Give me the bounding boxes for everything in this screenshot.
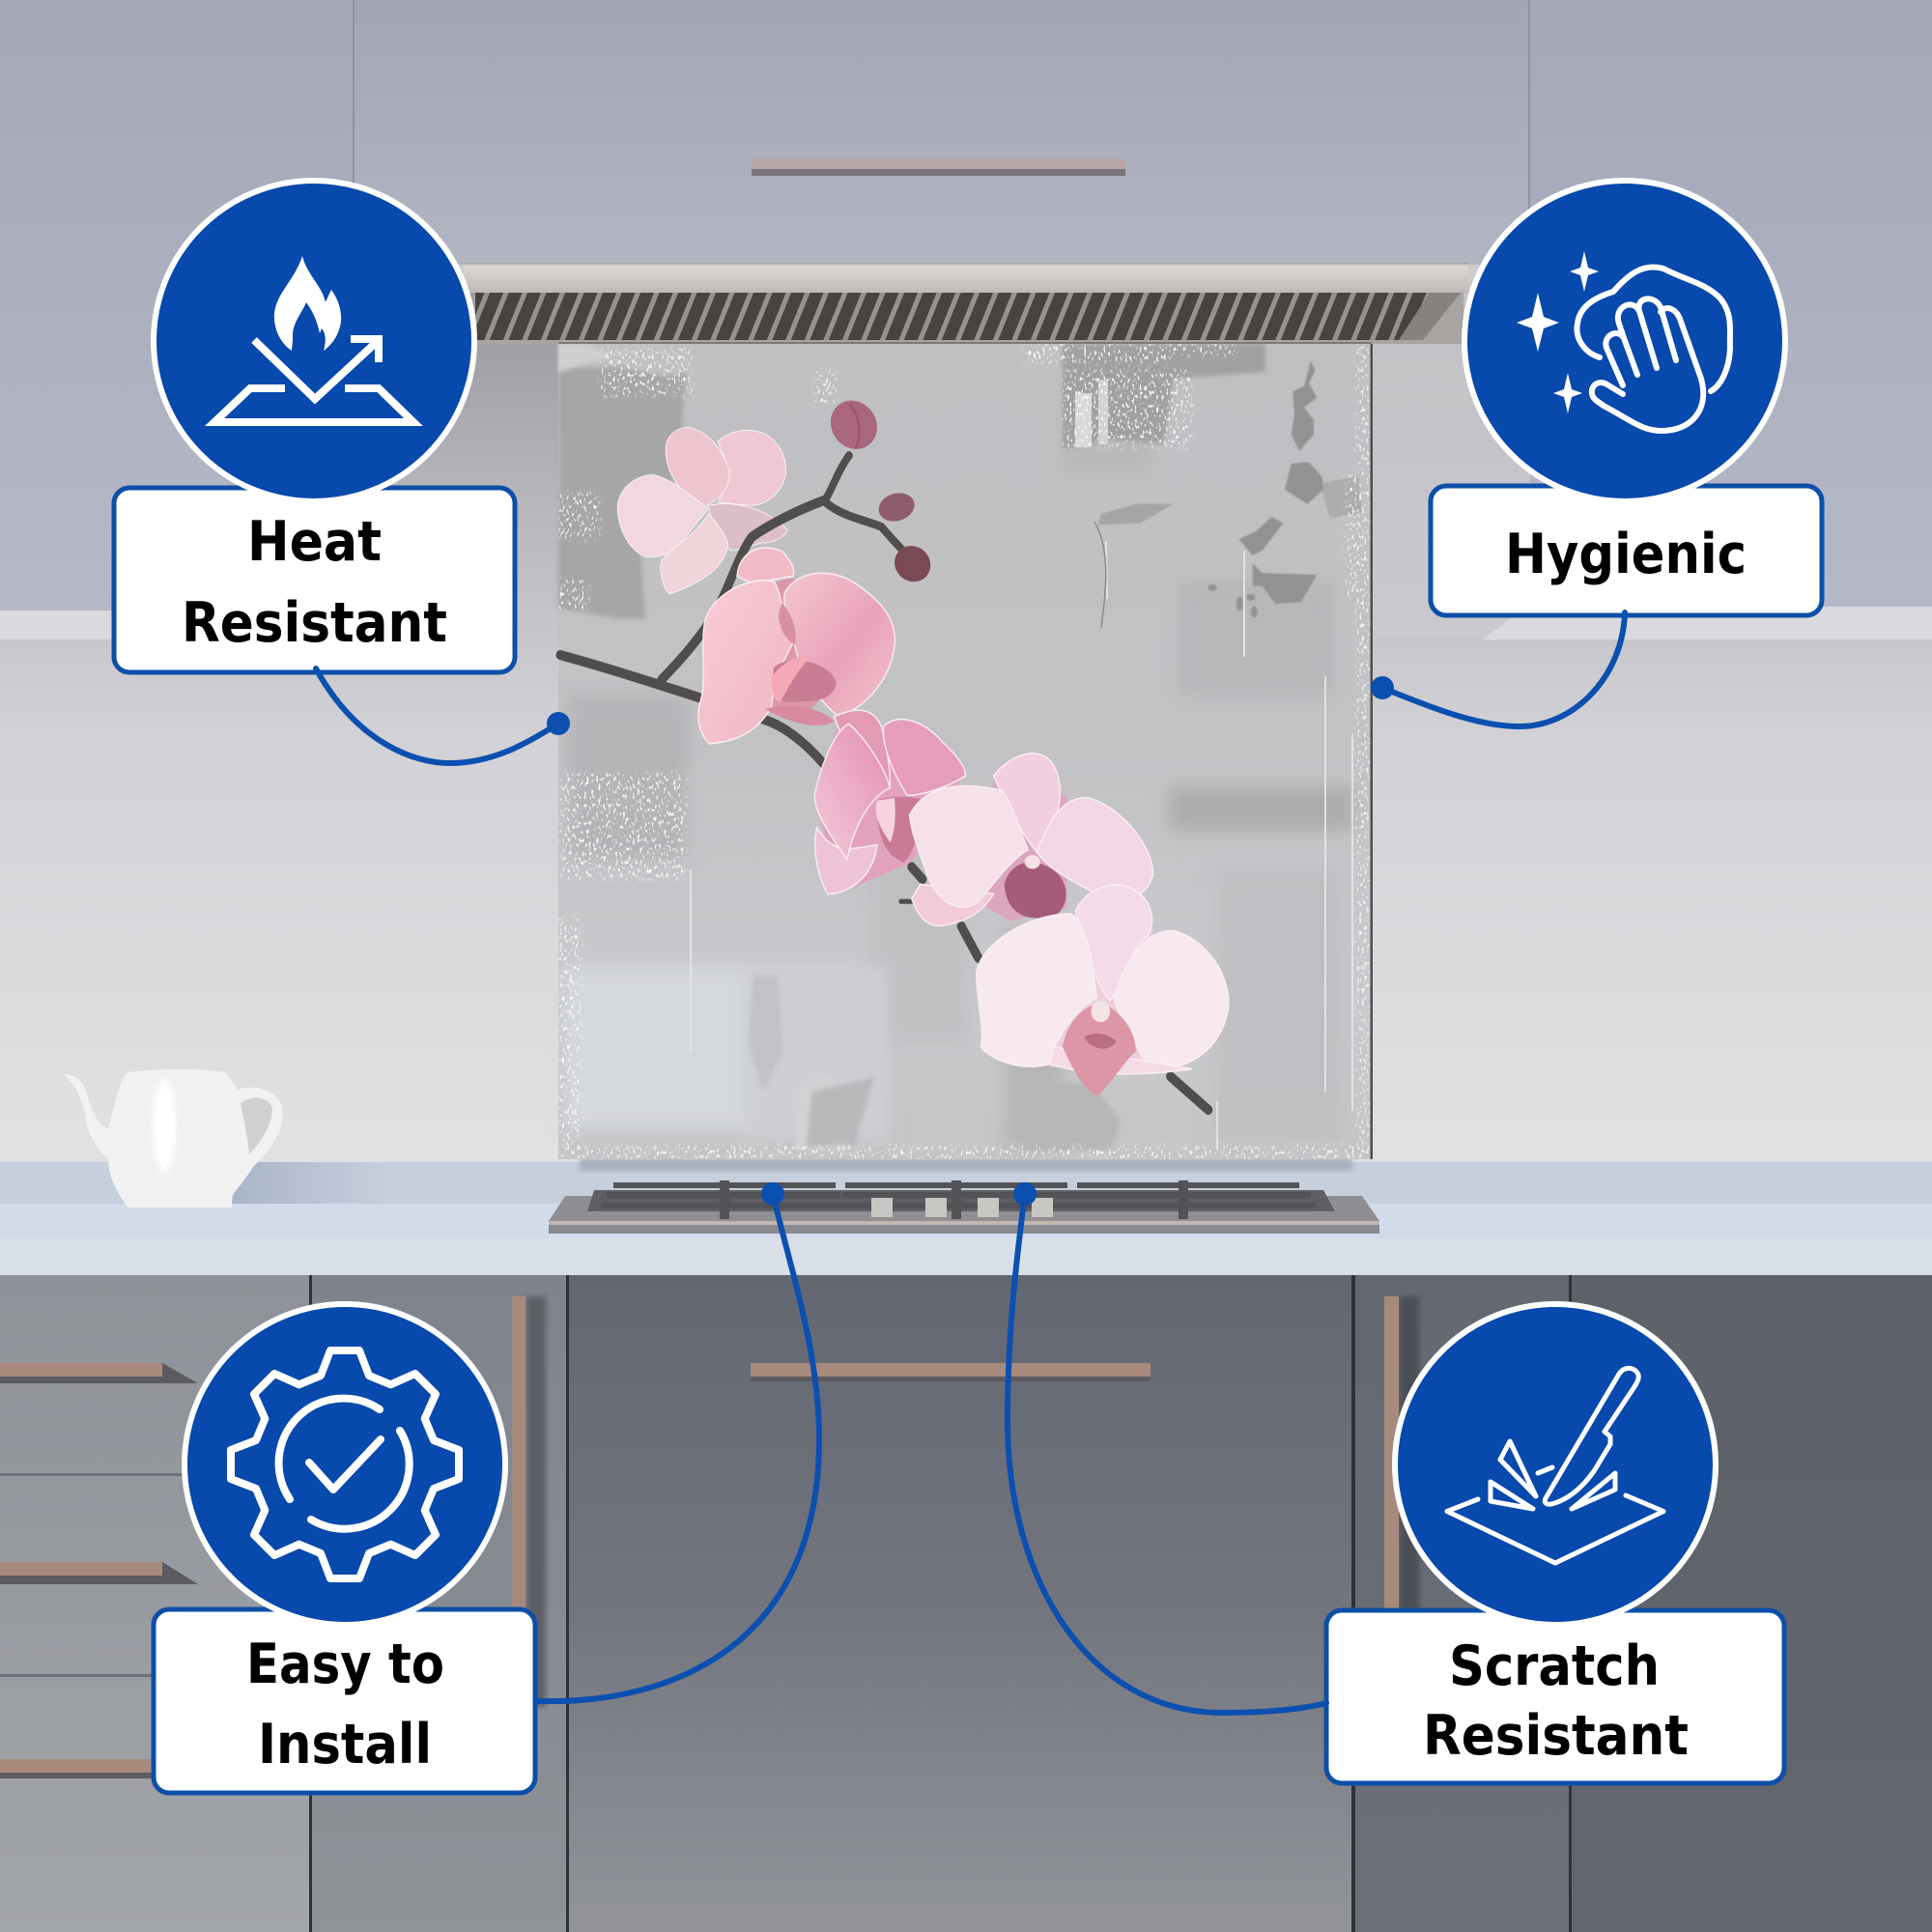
flower 3 [814, 710, 966, 895]
flower 1 [617, 428, 787, 594]
heading line 2: Resistant [1423, 1704, 1689, 1768]
upper cabinets [0, 0, 1932, 639]
scrape marks and pale strokes [691, 380, 1352, 1150]
heading: Scratch [1449, 1634, 1660, 1698]
connector: Hygienic to panel [1371, 612, 1625, 726]
gas hob [549, 1180, 1379, 1234]
heading: Heat [247, 510, 382, 574]
brush strokes [565, 415, 1352, 1150]
badge circle [1395, 1304, 1716, 1625]
card: Scratch Resistant [1326, 1304, 1784, 1783]
tiled wall [0, 599, 1932, 1169]
wall recess right of panel [1370, 290, 1534, 638]
upper cabinet handle [752, 158, 1125, 176]
orchid flower top [560, 392, 1229, 1110]
extractor hood [464, 263, 1468, 344]
lower cabinets [0, 1275, 1932, 1932]
connector: Scratch Resistant to hob [1008, 1182, 1326, 1713]
heading line 2: Resistant [182, 591, 447, 655]
flowers 2 to 5 [698, 548, 1229, 1096]
card: Hygienic [1431, 181, 1822, 615]
splashback panel: orchid painting [558, 342, 1373, 1159]
label box [114, 488, 515, 672]
heading: Easy to [246, 1633, 444, 1696]
badge circle [1464, 181, 1785, 501]
panel edge [558, 342, 1373, 1159]
icon: knife striking surface [1447, 1368, 1663, 1563]
panel base [558, 344, 1372, 1159]
white distressed speckle [558, 344, 1372, 1159]
icon: flame over reflected arrow [214, 256, 413, 422]
badge circle [154, 181, 474, 501]
card: Heat Resistant [114, 181, 515, 672]
teapot [63, 1069, 386, 1208]
icon: hand wiping with sparkles [1517, 251, 1730, 431]
upper stems [560, 655, 1208, 1110]
flower 5 [977, 885, 1229, 1096]
heading line 2: Install [258, 1713, 432, 1776]
dark brushed patches [558, 344, 1265, 1150]
flower 4 [909, 753, 1153, 926]
connector: Heat Resistant to panel [316, 668, 570, 763]
cabinet handles [0, 1296, 1419, 1778]
paint chip splatter [1098, 360, 1362, 617]
icon: gear with check mark [231, 1350, 459, 1578]
label box [1431, 486, 1822, 615]
counter upstand [0, 1162, 1932, 1205]
label box [1326, 1610, 1784, 1783]
heading: Hygienic [1505, 523, 1747, 586]
connector: Easy to Install to hob [537, 1182, 819, 1701]
flower 2 [698, 548, 895, 744]
wall recess left of panel [355, 290, 562, 638]
worktop [0, 1204, 1932, 1238]
branch and buds [662, 392, 934, 680]
card: Easy to Install [154, 1304, 535, 1793]
panel shadow on counter [580, 1157, 1352, 1171]
badge circle [185, 1304, 505, 1625]
label box [154, 1609, 535, 1793]
